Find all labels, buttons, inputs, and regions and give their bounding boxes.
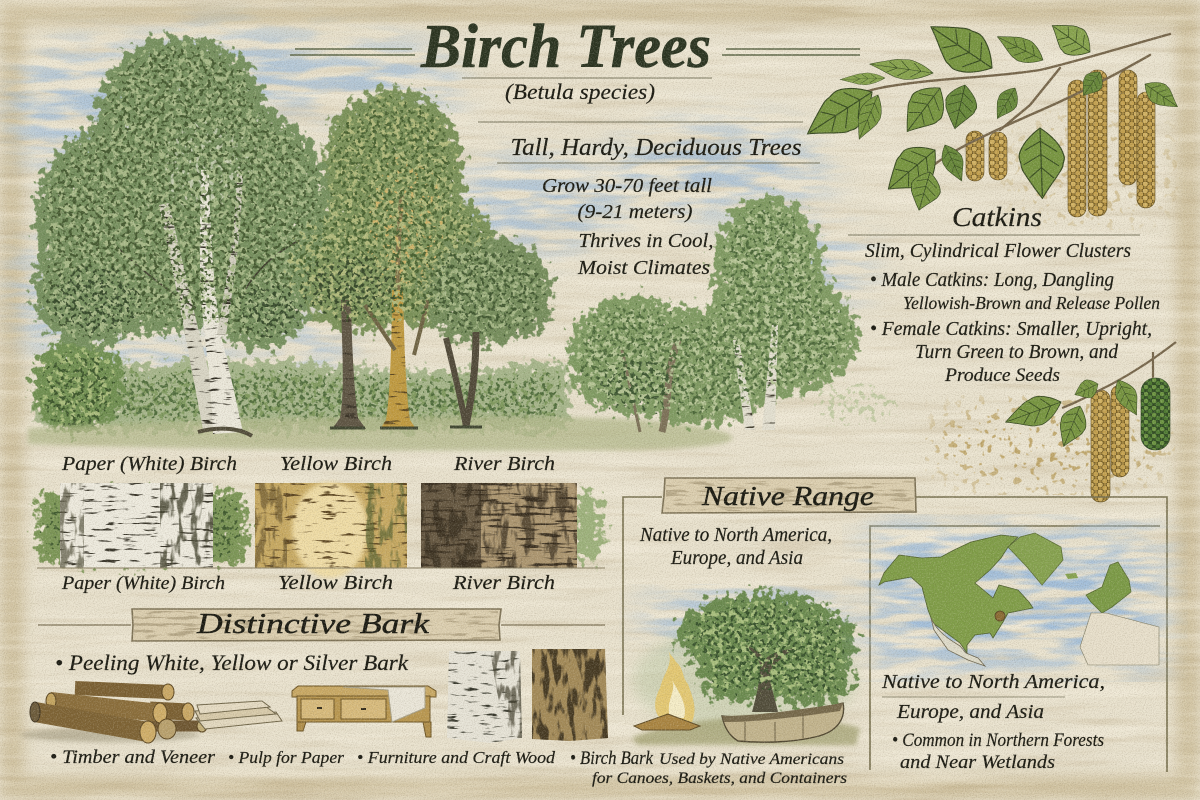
banner: native range: Native Range bbox=[701, 481, 874, 511]
branch bbox=[840, 34, 1170, 172]
illustration: tree and camp bbox=[632, 586, 863, 745]
labels: species above bark: Yellow Birch bbox=[280, 453, 392, 475]
illustration: lower catkin sprig bbox=[1001, 342, 1176, 502]
panel: native range bbox=[623, 478, 1167, 773]
text: bark and wood uses: for Canoes, Baskets, and Containers bbox=[592, 770, 847, 787]
text: bark and wood uses: • Timber and Veneer bbox=[50, 747, 216, 768]
text: catkin description: Slim, Cylindrical Flower Clusters bbox=[865, 240, 1131, 262]
map: north america and europe bbox=[871, 528, 1159, 668]
tree: grove crowns base bbox=[26, 30, 559, 356]
subtitle: (Betula species) bbox=[505, 79, 655, 104]
text: catkin description: Produce Seeds bbox=[944, 365, 1060, 386]
panel frame bbox=[623, 497, 1167, 772]
intro text block: (9-21 meters) bbox=[578, 201, 693, 223]
text: bark and wood uses: Used by Native Americans bbox=[659, 751, 844, 768]
text: native range notes: Native to North America, bbox=[881, 671, 1105, 693]
trunks: paper birch bbox=[115, 170, 300, 436]
labels: species below bark: Paper (White) Birch bbox=[61, 573, 225, 594]
banner: native range bbox=[662, 478, 916, 513]
leaves bbox=[797, 9, 1184, 214]
illustration: catkin branch bbox=[797, 9, 1184, 217]
text: native range notes: • Common in Northern Forests bbox=[892, 730, 1104, 751]
text: bark and wood uses: • Furniture and Craft Wood bbox=[357, 748, 556, 767]
text: native range notes: Europe, and Asia bbox=[896, 701, 1044, 723]
intro text block bbox=[478, 122, 820, 279]
text: catkin description: Turn Green to Brown, and bbox=[915, 341, 1119, 363]
labels: species below bark: Yellow Birch bbox=[278, 572, 393, 594]
icon: bark cylinders bbox=[447, 649, 608, 743]
trunks: grove trees bbox=[330, 195, 482, 429]
text: native to bbox=[639, 524, 832, 569]
title: Birch Trees bbox=[420, 13, 711, 81]
catkins: long male bbox=[966, 70, 1155, 217]
sky wash bbox=[5, 30, 870, 388]
text: catkin description: • Female Catkins: Smaller, Upright, bbox=[870, 318, 1152, 340]
intro text block: Thrives in Cool, bbox=[578, 230, 714, 252]
text: native to: Europe, and Asia bbox=[670, 547, 803, 569]
banner: distinctive bark bbox=[38, 609, 605, 641]
pollen speckle bbox=[925, 110, 1180, 495]
ground bbox=[28, 416, 732, 451]
bark: paper birch bbox=[32, 483, 252, 570]
tree: yellow birch crown bbox=[273, 82, 508, 337]
tree: distant birch group bbox=[561, 189, 915, 439]
illustration: birch grove bbox=[26, 30, 915, 451]
text: native range notes bbox=[881, 671, 1105, 773]
undergrowth bbox=[26, 328, 575, 446]
labels: species below bark: River Birch bbox=[452, 572, 555, 594]
icon: campfire bbox=[634, 650, 700, 730]
intro text block: Grow 30-70 feet tall bbox=[542, 175, 712, 197]
intro text block: Tall, Hardy, Deciduous Trees bbox=[510, 135, 802, 161]
heading: catkins: Catkins bbox=[952, 202, 1042, 232]
text: catkin description: • Male Catkins: Long, Dangling bbox=[870, 269, 1114, 291]
text: native range notes: and Near Wetlands bbox=[900, 752, 1055, 773]
tree: river birch crown bbox=[411, 230, 559, 350]
illustration: bark panels bbox=[32, 482, 608, 578]
text: peeling bark: • Peeling White, Yellow or Silver Bark bbox=[55, 650, 409, 675]
labels: species above bark: Paper (White) Birch bbox=[61, 453, 237, 475]
labels: species above bark: River Birch bbox=[453, 453, 555, 475]
intro text block: Moist Climates bbox=[577, 257, 710, 279]
labels: species below bark bbox=[61, 572, 555, 594]
title bbox=[290, 13, 860, 81]
text: bark and wood uses: • Pulp for Paper bbox=[228, 748, 344, 767]
banner: distinctive bark: Distinctive Bark bbox=[196, 609, 430, 640]
text: native to: Native to North America, bbox=[639, 524, 832, 546]
icon: bark canoe bbox=[722, 703, 844, 742]
bark: yellow birch bbox=[255, 482, 407, 578]
text: catkin description: Yellowish-Brown and Release Pollen bbox=[903, 293, 1160, 313]
text: bark and wood uses: • Birch Bark bbox=[570, 748, 653, 769]
labels: species above bark bbox=[61, 453, 555, 475]
tree: paper birch crown bbox=[26, 30, 336, 356]
icon: veneer sheets bbox=[195, 701, 282, 729]
text: bark and wood uses bbox=[50, 747, 847, 787]
icon: stacked logs bbox=[20, 684, 207, 743]
icon: birch bench bbox=[292, 686, 436, 737]
text: catkin description bbox=[865, 240, 1160, 386]
bark: river birch bbox=[421, 483, 608, 568]
